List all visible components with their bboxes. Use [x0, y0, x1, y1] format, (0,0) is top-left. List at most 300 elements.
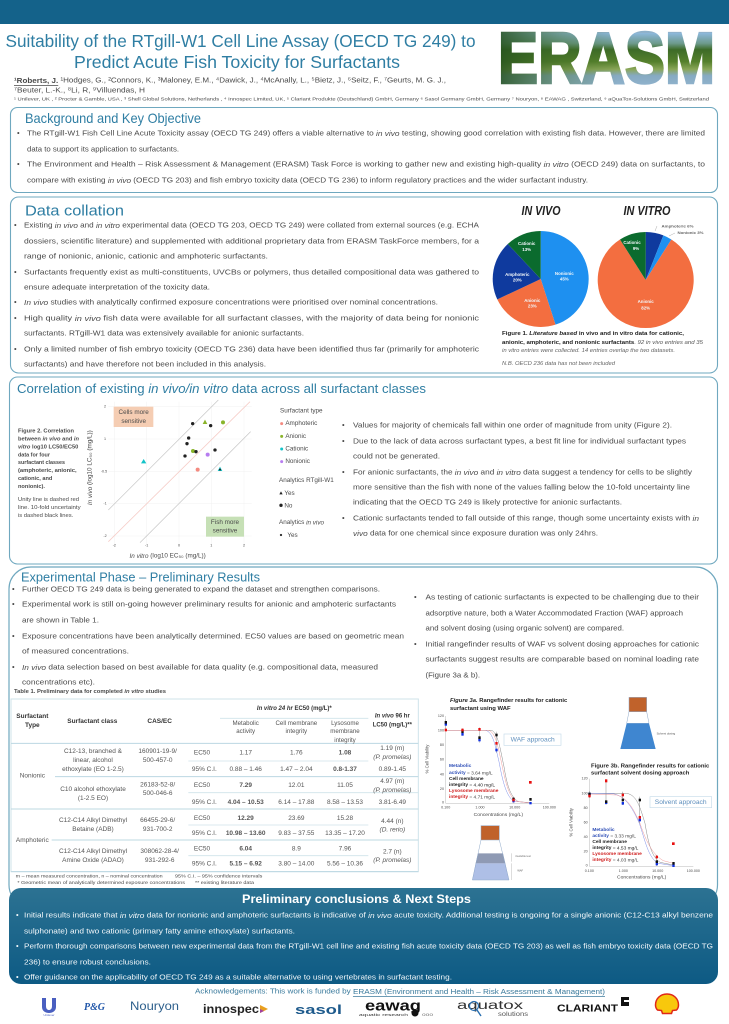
heading: background: Background and Key Objective [25, 110, 201, 126]
figure 3b: solvent rangefinder: 1.000 [619, 869, 628, 873]
figure 3a: WAF rangefinder: 100 [438, 728, 444, 732]
table rows: amphoteric: 9.83 – 37.55 [278, 830, 315, 837]
text: correlation bullets: vivo data for one chemical since exposure duration was only 24hrs. [353, 528, 598, 538]
legend [279, 407, 334, 539]
affiliations: ¹ Unilever, UK , ² Procter & Gamble, USA , ³ Shell Global Solutions, Netherlands , ⁴ Innospec Limited, UK, ⁵ Clariant Produkte (Deutschland) GmbH, Germany ⁶ Sasol Germany GmbH, Germany ⁷ Nouryon, ⁸ EAWAG , Switzerland, ⁹ aQuaTox-Solutions GmbH, Switzerland [14, 96, 710, 102]
table rows: nonionic: C12-13, branched & [64, 748, 123, 755]
axes labels: -1 [145, 544, 148, 548]
table rows: nonionic: 95% C.I. [192, 799, 217, 806]
text: data collation bullets: surfactants. RTgill-W1 data was extensively available for anionic surfactants. [24, 328, 304, 338]
axes labels: -2 [113, 544, 116, 548]
legend: 3b values: Lysosome membrane [592, 851, 642, 857]
text: correlation bullets: • [342, 468, 345, 476]
table rows: nonionic: 0.88 – 1.46 [229, 766, 262, 773]
icon: solvent dosing flask [620, 697, 676, 749]
caption: figure 3b: Figure 3b. Rangefinder results for cationic [591, 763, 709, 769]
figure 3b: solvent rangefinder: 40 [584, 835, 588, 839]
table rows: amphoteric: Amine Oxide (ADAO) [62, 857, 124, 864]
table header: integrity [286, 728, 308, 735]
figure 3a: WAF rangefinder: 20 [440, 787, 444, 791]
chart: in vivo pie: Amphoteric [505, 272, 530, 277]
figure 3b: solvent rangefinder: 100.000 [687, 869, 700, 873]
caption: figure 3a: surfactant using WAF [450, 706, 511, 712]
table rows: nonionic: 12.01 [288, 782, 305, 789]
authors: ⁷Beuter, L.-K., ⁸Li, R, ⁹Villuendas, H [14, 86, 145, 94]
table rows: nonionic: 1.76 [290, 749, 303, 756]
table rows: nonionic: C10 alcohol ethoxylate [60, 786, 126, 793]
chart: in vitro pie: Nonionic 3% [678, 230, 704, 235]
chart: in vivo pie: 23% [528, 304, 537, 308]
text: conclusions bullets: 236) to ensure robust conclusions. [24, 958, 151, 966]
text: experimental left bullets: concentrations etc). [22, 678, 95, 686]
authors: ¹Roberts, J. ¹Hodges, G., ²Connors, K., ³Maloney, E.M., ⁴Dawick, J., ⁴McAnally, L., ⁵Bietz, J., ⁶Seitz, F., ⁷Geurts, M. G. J., [14, 76, 446, 84]
legend: Yes [284, 490, 295, 497]
logo: sasol: sasol [295, 1003, 342, 1017]
table rows: amphoteric: 5.56 – 10.36 [327, 860, 363, 867]
figure 3b: solvent rangefinder: 0 [586, 864, 588, 868]
table rows: amphoteric: 308062-28-4/ [140, 848, 179, 855]
figure 3b: solvent rangefinder [568, 763, 712, 881]
table rows: nonionic: 1.08 [339, 749, 352, 756]
chart: in vitro pie: Amphoteric 6% [662, 224, 694, 228]
table rows: nonionic: 1.47 – 2.04 [280, 766, 313, 773]
text: experimental left bullets: Further OECD TG 249 data is being generated to expand the dataset and strengthen comparisons. [22, 584, 380, 594]
legend: 3a values: integrity = 4.40 mg/L [449, 782, 495, 788]
table rows: nonionic: 1.17 [239, 749, 252, 756]
panel: conclusions [9, 888, 718, 984]
caption: figure 3a: Figure 3a. Rangefinder results for cationic [450, 698, 567, 704]
logo: Unilever: Unilever [43, 1013, 55, 1017]
legend: Amphoteric [285, 420, 317, 427]
logo: eawag: ooo [422, 1012, 434, 1017]
text: experimental left bullets: Experimental work is still on-going however preliminary results for anionic and amphoteric surfactants [22, 600, 396, 608]
text: data collation bullets: • [14, 220, 17, 230]
text: correlation bullets: • [342, 420, 345, 430]
text: experimental right bullets: and solvent dosing (using organic solvent) are compared. [426, 624, 624, 632]
heading: correlation: Correlation of existing in vivo/in vitro data across all surfactant classes [17, 382, 426, 396]
figure 3a: WAF rangefinder: 120 [438, 714, 444, 718]
text: experimental right bullets: adsorptive nature, both a Water Accommodated Fraction (WAF) approach [426, 608, 683, 618]
figure 3a: WAF rangefinder: 10.000 [509, 806, 520, 810]
legend: 3b values: Metabolic [592, 827, 615, 833]
table rows: nonionic: (P. promelas) [373, 787, 411, 794]
panel: data collation [10, 197, 718, 373]
text: conclusions bullets [16, 910, 713, 982]
axes labels: 1 [210, 544, 212, 548]
logo: Clariant: CLARIANT [557, 1004, 618, 1014]
legend: 3b values: Cell membrane [592, 839, 627, 845]
figure 3b: solvent rangefinder: 60 [584, 820, 588, 824]
legend: Nonionic [285, 458, 310, 465]
table rows: nonionic: EC50 [194, 782, 210, 789]
table header: Metabolic [232, 720, 259, 727]
caption: figure 2: surfactant classes [18, 460, 65, 466]
table header: Surfactant [16, 713, 49, 720]
logo: P&G: P&G [84, 1001, 105, 1013]
caption: figure 1: in vitro entries were collected. 14 entries overlap the two datasets. [502, 348, 675, 354]
text: background bullets: data to support its application to surfactants. [27, 144, 179, 154]
figure 3b: solvent rangefinder: 0.100 [585, 869, 594, 873]
label: solvent approach [650, 797, 712, 808]
chart: in vitro pie: 9% [633, 246, 639, 251]
text: data collation bullets: • [14, 268, 17, 276]
heading: conclusions: Preliminary conclusions & Next Steps [242, 892, 471, 906]
title: Predict Acute Fish Toxicity for Surfactants [74, 52, 400, 72]
table rows: nonionic: 160901-19-9/ [138, 748, 177, 755]
text: background bullets: compare with existing in vivo (OECD TG 203) and fish embryo toxicity data (OECD TG 236) to inform regulatory practices and the wider surfactant industry. [27, 176, 588, 184]
text: correlation bullets: Due to the lack of data across surfactant types, a best fit line for individual surfactant types [353, 436, 686, 446]
legend: 3a values: Metabolic [449, 763, 472, 769]
table rows: amphoteric: 95% C.I. [192, 830, 217, 837]
label: cells more sensitive: Cells more [119, 409, 149, 416]
caption: figure 3b [591, 763, 709, 776]
table rows: amphoteric: 95% C.I. [192, 860, 217, 867]
label: WAF approach: WAF approach [511, 736, 555, 743]
table rows: amphoteric: (D. rerio) [380, 826, 405, 833]
table 1 [11, 699, 418, 872]
legend: Surfactant type [280, 407, 323, 414]
text: data collation bullets: • [14, 344, 17, 354]
icon: WAF flask [472, 826, 531, 880]
logos row [42, 994, 678, 1018]
text: experimental left bullets: of measured concentrations. [22, 646, 129, 656]
logo: aquatox: aquatox [457, 1000, 523, 1012]
table rows: nonionic: (P. promelas) [373, 754, 411, 761]
chart: in vivo pie [493, 204, 589, 327]
chart: in vivo pie: 13% [522, 247, 531, 252]
text: correlation bullets: Values for majority of chemicals fall within one order of magnitude from unity (Figure 2). [353, 420, 672, 430]
axes labels [86, 405, 245, 559]
text: background bullets [17, 128, 705, 184]
caption: figure 3a [450, 698, 567, 712]
table header [16, 706, 413, 744]
heading: data collation: Data collation [25, 202, 124, 220]
axes labels: 2 [104, 405, 106, 409]
text: correlation bullets: • [342, 514, 345, 522]
table rows: nonionic: 0.89-1.45 [379, 766, 406, 773]
authors [14, 76, 446, 94]
panel: experimental phase [9, 567, 718, 907]
heading: experimental phase: Experimental Phase – Preliminary Results [21, 570, 260, 584]
table header: Cell membrane [275, 720, 318, 727]
figure 3a: WAF rangefinder: 80 [440, 743, 444, 747]
table header: In vivo 96 hr [375, 714, 410, 720]
table footnotes [16, 873, 262, 885]
table rows: amphoteric: 931-292-6 [145, 857, 175, 864]
table rows: amphoteric: Amphoteric [16, 837, 49, 844]
text: background bullets: • [17, 128, 20, 138]
table rows: amphoteric: 66455-29-6/ [140, 817, 175, 824]
text: conclusions bullets: Perform thorough comparisons between new experimental data from the RTgill-W1 cell line and existing fish acute toxicity data (OECD TG 203) as well as fish embryo toxicity data (OECD TG [24, 942, 713, 950]
text: correlation bullets: indicating that the OECD TG 249 is likely protective for anionic surfactants. [353, 498, 622, 506]
text: experimental left bullets: • [12, 600, 15, 608]
table rows: nonionic: 7.29 [239, 782, 252, 789]
legend: No [284, 502, 293, 509]
table rows: amphoteric: 12.29 [238, 815, 254, 822]
figure 3b: solvent rangefinder: Concentrations (mg/L) [617, 875, 667, 881]
figure 3a: WAF rangefinder: 0.100 [441, 806, 450, 810]
icon: solvent dosing flask: Solvent dosing [657, 732, 676, 736]
caption: figure 3b: surfactant solvent dosing approach [591, 770, 689, 776]
table rows: amphoteric: 8.9 [292, 845, 301, 852]
caption: figure 2: Figure 2. Correlation [18, 429, 74, 435]
label: fish more sensitive [206, 517, 244, 537]
table rows: amphoteric: 3.80 – 14.00 [278, 860, 315, 867]
text: conclusions bullets: Initial results indicate that in vitro data for nonionic and amphoteric surfactants is indicative of in vivo acute toxicity. Additional testing is ongoing for a single anionic (C12-C13 alkyl benzene [24, 910, 713, 920]
text: conclusions bullets: • [16, 972, 19, 982]
text: experimental right bullets: • [414, 640, 417, 648]
text: data collation bullets: • [14, 298, 17, 306]
chart: in vitro pie [598, 204, 704, 328]
caption: figure 2: is dashed black lines. [18, 513, 73, 519]
caption: figure 2: line. 10-fold uncertainty [18, 505, 81, 511]
logo: eawag [359, 998, 434, 1017]
text: data collation bullets: dossiers, scientific literature) and supplemented with additional proprietary data from ERASM TaskForce members, for a [24, 236, 480, 246]
text: correlation bullets: could not be generated. [353, 452, 440, 460]
legend: 3a values: integrity = 4.71 mg/L [449, 794, 495, 800]
chart: in vivo pie: 45% [560, 276, 569, 282]
caption: figure 1: N.B. OECD 236 data has not been included [502, 361, 616, 367]
axes labels: -1 [103, 502, 107, 506]
table rows: amphoteric: C12-C14 Alkyl Dimethyl [59, 848, 127, 855]
panel: correlation [10, 377, 718, 564]
text: correlation bullets: • [342, 436, 345, 446]
text: correlation bullets: For anionic surfactants, the in vivo and in vitro data suggest a tendency for cells to be slightly [353, 468, 692, 476]
legend: Analytics RTgill-W1 [279, 477, 334, 484]
caption: figure 1 [502, 331, 704, 367]
table rows: nonionic: EC50 [194, 749, 210, 756]
figure 3b: solvent rangefinder: 80 [584, 806, 588, 810]
table rows: amphoteric: 13.35 – 17.20 [325, 830, 365, 837]
text: background bullets: • [17, 160, 20, 168]
chart: in vitro pie: Anionic [638, 299, 654, 304]
data points [141, 420, 225, 472]
table rows: nonionic: 11.05 [337, 782, 353, 789]
table header: Lysosome [331, 720, 359, 727]
logo: Unilever [42, 998, 56, 1017]
chart: in vivo pie: Nonionic [555, 271, 574, 276]
caption: figure 1: Figure 1. Literature based in vivo and in vitro data for cationic, [502, 331, 685, 337]
axes labels: -2 [103, 534, 107, 538]
table rows: amphoteric: EC50 [194, 815, 210, 822]
figure 3b: solvent rangefinder: 120 [582, 777, 588, 781]
logo: Clariant [557, 997, 629, 1014]
figure 3b: solvent rangefinder: 100 [582, 791, 588, 795]
text: experimental right bullets: • [414, 592, 417, 602]
legend: Analytics in vivo [279, 519, 325, 526]
table rows: amphoteric: 23.69 [288, 815, 305, 822]
icon: WAF flask: insoluble test [515, 854, 531, 858]
caption: figure 2: cationic, and [18, 476, 52, 482]
legend: 3a values: Lysosome membrane [449, 788, 499, 794]
text: background bullets: The Environment and Health – Risk Assessment & Management (ERASM) Task Force is working to gather new and existing high-quality in vitro (OECD 249) data on surfactants, to [27, 160, 705, 168]
chart: in vivo pie: Anionic [524, 298, 541, 303]
text: correlation bullets [342, 420, 699, 538]
caption: figure 2: Unity line is dashed red [18, 497, 79, 503]
legend: Anionic [285, 433, 306, 440]
label: solvent approach: Solvent approach [655, 799, 707, 806]
label: fish more sensitive: Fish more [211, 519, 240, 526]
table rows: nonionic: linear, alcohol [73, 757, 113, 764]
table rows: amphoteric: EC50 [194, 845, 210, 852]
legend: 3b values: integrity = 4.53 mg/L [592, 845, 639, 851]
text: data collation bullets: • [14, 314, 17, 322]
figure 3a: WAF rangefinder: 40 [440, 772, 444, 776]
table rows: nonionic: 0.8-1.37 [333, 766, 357, 773]
text: experimental left bullets: In vivo data selection based on best available for data quality (e.g. compositional data, measured [22, 662, 378, 672]
table rows: nonionic: 6.14 – 17.88 [278, 799, 315, 806]
axes labels: 2 [243, 544, 245, 548]
table footnotes: ** existing literature data [195, 880, 255, 885]
chart: in vitro pie: IN VITRO [624, 204, 671, 218]
axes labels: 1 [104, 437, 106, 441]
table footnotes: * Geometric mean of analytically determined exposure concentrations [17, 880, 185, 885]
label: fish more sensitive: sensitive [213, 527, 238, 534]
figure 3a: WAF rangefinder [438, 698, 567, 818]
icon: WAF flask: WAF [517, 868, 524, 872]
table header: integrity [334, 737, 357, 744]
text: data collation bullets [14, 220, 480, 368]
logo: Shell [656, 994, 678, 1014]
figure 3a: WAF rangefinder: 100.000 [543, 806, 556, 810]
caption: figure 2: nonionic). [18, 484, 46, 490]
legend: 3a values: activity = 3.64 mg/L [449, 770, 493, 776]
text: data collation bullets: High quality in vivo fish data were available for all surfactant classes, with the majority of data being for nonionic [24, 314, 479, 322]
legend: 3b values: integrity = 4.03 mg/L [592, 857, 639, 863]
axes labels: -0.5 [101, 470, 107, 474]
table rows: amphoteric [16, 815, 411, 867]
logo: aquatox [457, 1000, 528, 1018]
table header: Surfactant class [67, 718, 118, 725]
caption: figure 2: vitro log10 LC50/EC50 [18, 444, 78, 450]
caption: figure 1: anionic, amphoteric, and nonionic surfactants . 92 in vivo entries and 35 [502, 340, 704, 346]
table rows: amphoteric: (P. promelas) [373, 857, 411, 864]
legend: Cationic [285, 445, 308, 452]
table rows: amphoteric: 7.96 [339, 845, 352, 852]
table footnotes: m – mean measured concentration, n – nominal concentration [16, 873, 163, 878]
table rows: nonionic: 8.58 – 13.53 [327, 799, 363, 806]
table rows: amphoteric: 931-700-2 [143, 826, 173, 833]
text: conclusions bullets: • [16, 942, 19, 950]
axis label: figure 3a y axis: % Cell Viability [424, 744, 430, 773]
legend: 3a values: Cell membrane [449, 776, 484, 782]
table rows: amphoteric: 15.28 [337, 815, 353, 822]
text: background bullets: The RTgill-W1 Fish Cell Line Acute Toxicity assay (OECD TG 249) offers a viable alternative to in vivo testing, showing good correlation with existing fish data. However, there are limited [27, 128, 705, 138]
text: experimental right bullets: As testing of cationic surfactants is expected to be challenging due to their [426, 592, 700, 602]
table header: activity [236, 728, 256, 735]
axes labels: 0 [178, 544, 180, 548]
text: experimental left bullets: • [12, 662, 15, 672]
text: conclusions bullets: sulphonate) and two cationic (primary fatty amine ethoxylate) surfactants. [24, 926, 295, 936]
table header: In vitro 24 hr EC50 (mg/L)* [257, 706, 332, 712]
logo: innospec: innospec [203, 1002, 259, 1016]
logo: Nouryon: Nouryon [130, 1001, 179, 1013]
text: experimental right bullets [414, 592, 700, 680]
figure 3b: solvent rangefinder: 10.000 [652, 869, 663, 873]
axes labels: In vivo (log10 LC₅₀ (mg/L)) [86, 430, 93, 505]
table rows: nonionic: 4.97 (m) [380, 778, 404, 785]
table header: membrane [330, 728, 360, 735]
figure 3b: solvent rangefinder: 20 [584, 850, 588, 854]
table rows: nonionic [20, 745, 411, 806]
table rows: amphoteric: 2.7 (n) [383, 848, 402, 855]
table rows: nonionic: 26183-52-8/ [140, 781, 175, 788]
text: correlation bullets: more sensitive than the fish with none of the values falling below the 10-fold uncertainty line [353, 482, 690, 492]
table header: CAS/EC [147, 718, 172, 725]
chart: in vivo pie: Cationic [518, 241, 536, 246]
table rows: amphoteric: 10.98 – 13.60 [226, 830, 266, 837]
label: cells more sensitive [114, 407, 153, 427]
text: experimental left bullets: Exposure concentrations have been analytically determined. EC50 values are based on geometric mean [22, 632, 404, 640]
table header: LC50 (mg/L)** [373, 723, 413, 729]
table header: Type [25, 722, 40, 729]
text: experimental left bullets [12, 584, 404, 686]
legend: 3b values [592, 827, 642, 863]
text: data collation bullets: Surfactants frequently exist as multi-constituents, UVCBs or polymers, thus detailed compositional data was gathered to [24, 268, 479, 276]
text: experimental right bullets: surfactants suggest results are comparable based on nominal loading rate [426, 654, 699, 664]
title [6, 31, 476, 72]
figure 3b: solvent rangefinder: % Cell Viability [568, 807, 573, 837]
text: conclusions bullets: Offer guidance on the applicability of OECD TG 249 as a suitable alternative to using vertebrates in surfactant testing. [24, 972, 452, 982]
label: cells more sensitive: sensitive [121, 418, 146, 425]
chart: in vivo pie: IN VIVO [522, 204, 561, 218]
table rows: nonionic: 500-457-0 [143, 757, 173, 764]
text: experimental left bullets: are shown in Table 1. [22, 616, 99, 624]
text: experimental right bullets: Initial rangefinder results of WAF vs solvent dosing approaches for cationic [426, 640, 699, 648]
text: correlation bullets: Cationic surfactants tended to fall outside of this range, though some uncertainty exists with in [353, 514, 699, 522]
table rows: nonionic: 95% C.I. [192, 766, 217, 773]
figure 3a: WAF rangefinder: 60 [440, 758, 444, 762]
table rows: nonionic: 3.81-6.49 [379, 799, 406, 806]
text: conclusions bullets: • [16, 910, 19, 920]
table rows: amphoteric: Betaine (ADB) [72, 826, 114, 833]
table rows: nonionic: 500-046-6 [143, 790, 173, 797]
text: experimental left bullets: • [12, 584, 15, 594]
text: data collation bullets: In vivo studies with analytically confirmed exposure concentrations were prioritised over nominal concentrations. [24, 298, 438, 306]
legend: 3b values: activity = 3.33 mg/L [592, 833, 636, 839]
table rows: nonionic: 1.19 (m) [380, 745, 404, 752]
caption: figure 2: data for four [18, 452, 50, 458]
axes labels: In vitro (log10 EC₅₀ (mg/L)) [130, 552, 206, 559]
text: experimental left bullets: • [12, 632, 15, 640]
figure 3a: WAF rangefinder: 1.000 [475, 806, 485, 810]
chart: scatter plot [86, 400, 252, 559]
logo: eawag: eawag [365, 998, 421, 1014]
table rows: nonionic: ethoxylate (EO 1-2.5) [62, 766, 124, 773]
table rows: amphoteric: C12-C14 Alkyl Dimethyl [59, 817, 127, 824]
table title: Table 1. Preliminary data for completed in vitro studies [14, 689, 166, 695]
figure 3a: WAF rangefinder: 0 [442, 801, 444, 805]
figure 3a: WAF rangefinder: Concentrations (mg/L) [474, 812, 523, 818]
chart: in vitro pie: 82% [641, 306, 650, 310]
text: data collation bullets: Only a limited number of fish embryo toxicity (OECD TG 236) data have been identified thus far (primarily for amphoteric [24, 344, 479, 354]
table footnotes: 95% C.I. – 95% confidence intervals [175, 873, 262, 878]
table rows: amphoteric: 5.15 – 6.92 [229, 860, 262, 867]
caption: figure 2 [18, 429, 81, 519]
table rows: nonionic: 4.04 – 10.53 [228, 799, 264, 806]
top banner [0, 0, 729, 24]
table rows: nonionic: (1-2.5 EO) [78, 795, 108, 802]
logo: eawag: aquatic research [359, 1012, 408, 1017]
table rows: amphoteric: 4.44 (n) [381, 818, 404, 825]
acknowledgements: Acknowledgements: This work is funded by ERASM (Environment and Health – Risk Assessment & Management) [195, 986, 605, 996]
text: data collation bullets: ensure adequate interpretation of the toxicity data. [24, 282, 210, 292]
caption: figure 2: between in vivo and in [18, 436, 79, 442]
caption: figure 2: (amphoteric, anionic, [18, 468, 77, 474]
title: Suitability of the RTgill-W1 Cell Line Assay (OECD TG 249) to [6, 31, 476, 51]
table rows: nonionic: Nonionic [20, 772, 46, 779]
table rows: amphoteric: 6.04 [239, 845, 252, 852]
